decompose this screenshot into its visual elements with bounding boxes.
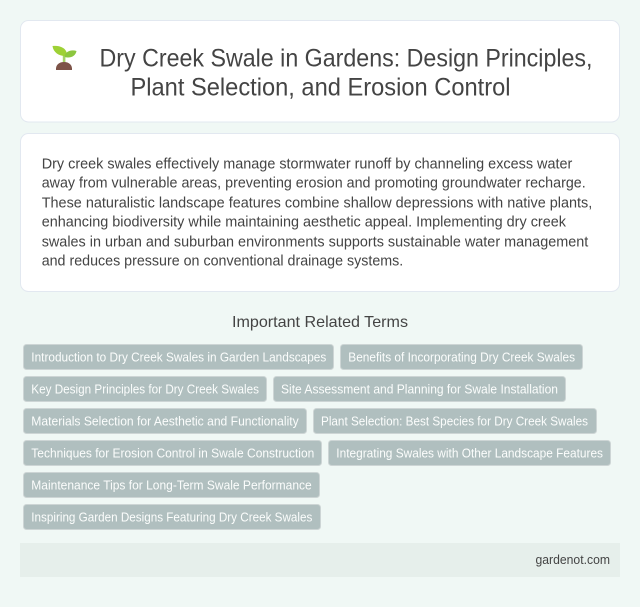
text block: summary paragraph: swales in urban and suburban environments supports sustainable water management bbox=[42, 234, 588, 250]
text block: summary paragraph: enhancing biodiversity while maintaining aesthetic appeal. Implementing dry creek bbox=[42, 215, 567, 231]
tag: erosion control: Techniques for Erosion Control in Swale Construction bbox=[31, 446, 314, 460]
text block: summary paragraph: and reduces pressure on conventional drainage systems. bbox=[42, 253, 403, 269]
title bbox=[100, 45, 592, 102]
text block: summary paragraph: away from vulnerable areas, preventing erosion and promoting groundwater recharge. bbox=[42, 176, 586, 192]
tag: introduction: Introduction to Dry Creek Swales in Garden Landscapes bbox=[31, 350, 326, 364]
panel: title card bbox=[20, 20, 620, 122]
tag: plant selection bbox=[314, 408, 596, 434]
tag: inspiring designs: Inspiring Garden Designs Featuring Dry Creek Swales bbox=[31, 510, 312, 524]
tag: site assessment: Site Assessment and Planning for Swale Installation bbox=[281, 382, 558, 396]
tag list bbox=[24, 344, 610, 530]
tag: design principles: Key Design Principles for Dry Creek Swales bbox=[31, 382, 259, 396]
tag: site assessment bbox=[274, 376, 566, 402]
tag: integrating swales: Integrating Swales with Other Landscape Features bbox=[336, 446, 603, 460]
icon: seedling bbox=[52, 46, 76, 70]
tag: maintenance tips bbox=[24, 472, 320, 498]
tag: integrating swales bbox=[328, 440, 610, 466]
tag: materials selection bbox=[24, 408, 306, 434]
text block: summary paragraph bbox=[42, 156, 592, 269]
heading: important related terms: Important Related Terms bbox=[232, 314, 408, 331]
panel: summary text card bbox=[20, 134, 620, 292]
tag: erosion control bbox=[24, 440, 322, 466]
tag: design principles bbox=[24, 376, 266, 402]
tag: maintenance tips: Maintenance Tips for Long-Term Swale Performance bbox=[31, 478, 312, 492]
tag: benefits: Benefits of Incorporating Dry Creek Swales bbox=[348, 350, 575, 364]
text block: summary paragraph: These naturalistic landscape features combine shallow depressions with native plants, bbox=[42, 195, 592, 211]
tag: materials selection: Materials Selection for Aesthetic and Functionality bbox=[31, 414, 299, 428]
text block: summary paragraph: Dry creek swales effectively manage stormwater runoff by channeling excess water bbox=[42, 156, 572, 172]
tag: plant selection: Plant Selection: Best Species for Dry Creek Swales bbox=[321, 414, 588, 428]
tag: inspiring designs bbox=[24, 504, 320, 530]
tag: introduction bbox=[24, 344, 334, 370]
title: Dry Creek Swale in Gardens: Design Principles, bbox=[100, 45, 592, 73]
tag: benefits bbox=[340, 344, 582, 370]
footer source text: gardenot.com bbox=[536, 552, 610, 567]
title: Plant Selection, and Erosion Control bbox=[130, 74, 510, 102]
footer bar bbox=[20, 543, 620, 577]
